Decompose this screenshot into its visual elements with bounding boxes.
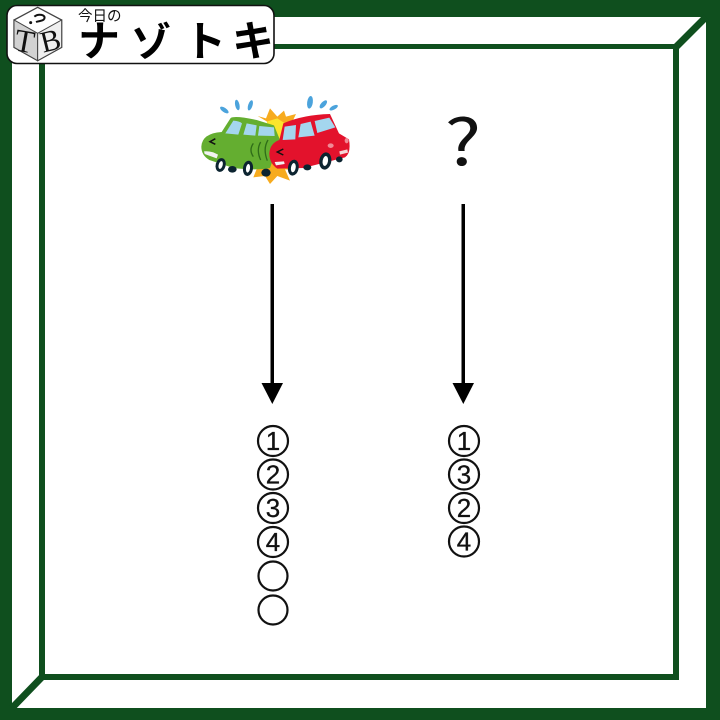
icon: sweat drops [219, 96, 339, 115]
main heading: ナ [78, 18, 120, 65]
left sequence of circled numbers: 4 [266, 527, 280, 557]
icon: car crash illustration [201, 96, 350, 184]
right sequence of circled numbers: 4 [457, 526, 471, 556]
arrow: right [452, 204, 474, 404]
left sequence of circled numbers: 1 [266, 426, 280, 456]
icon: TB cube logo: B [37, 23, 64, 60]
main heading: キ [232, 18, 274, 65]
right sequence of circled numbers: 1 [457, 426, 471, 456]
right sequence of circled numbers: 2 [457, 493, 471, 523]
icon: TB cube logo [12, 7, 64, 61]
icon: green car [201, 117, 280, 177]
left sequence of circled numbers: 2 [266, 460, 280, 490]
left sequence of circled numbers: 3 [266, 493, 280, 523]
main heading: ゾ [131, 21, 171, 65]
left sequence of circled numbers [258, 426, 288, 624]
right sequence of circled numbers: 3 [457, 460, 471, 490]
right sequence of circled numbers [449, 426, 479, 556]
main heading: ト [184, 18, 226, 65]
arrow: left [262, 204, 283, 404]
icon: explosion star [253, 108, 297, 184]
header badge: 今日のナゾトキ [7, 6, 274, 65]
question mark: ? [445, 92, 481, 184]
small heading: 今日の [78, 8, 122, 25]
main heading [78, 18, 274, 65]
icon: TB cube logo: T [12, 22, 38, 60]
icon: red car [269, 114, 350, 176]
